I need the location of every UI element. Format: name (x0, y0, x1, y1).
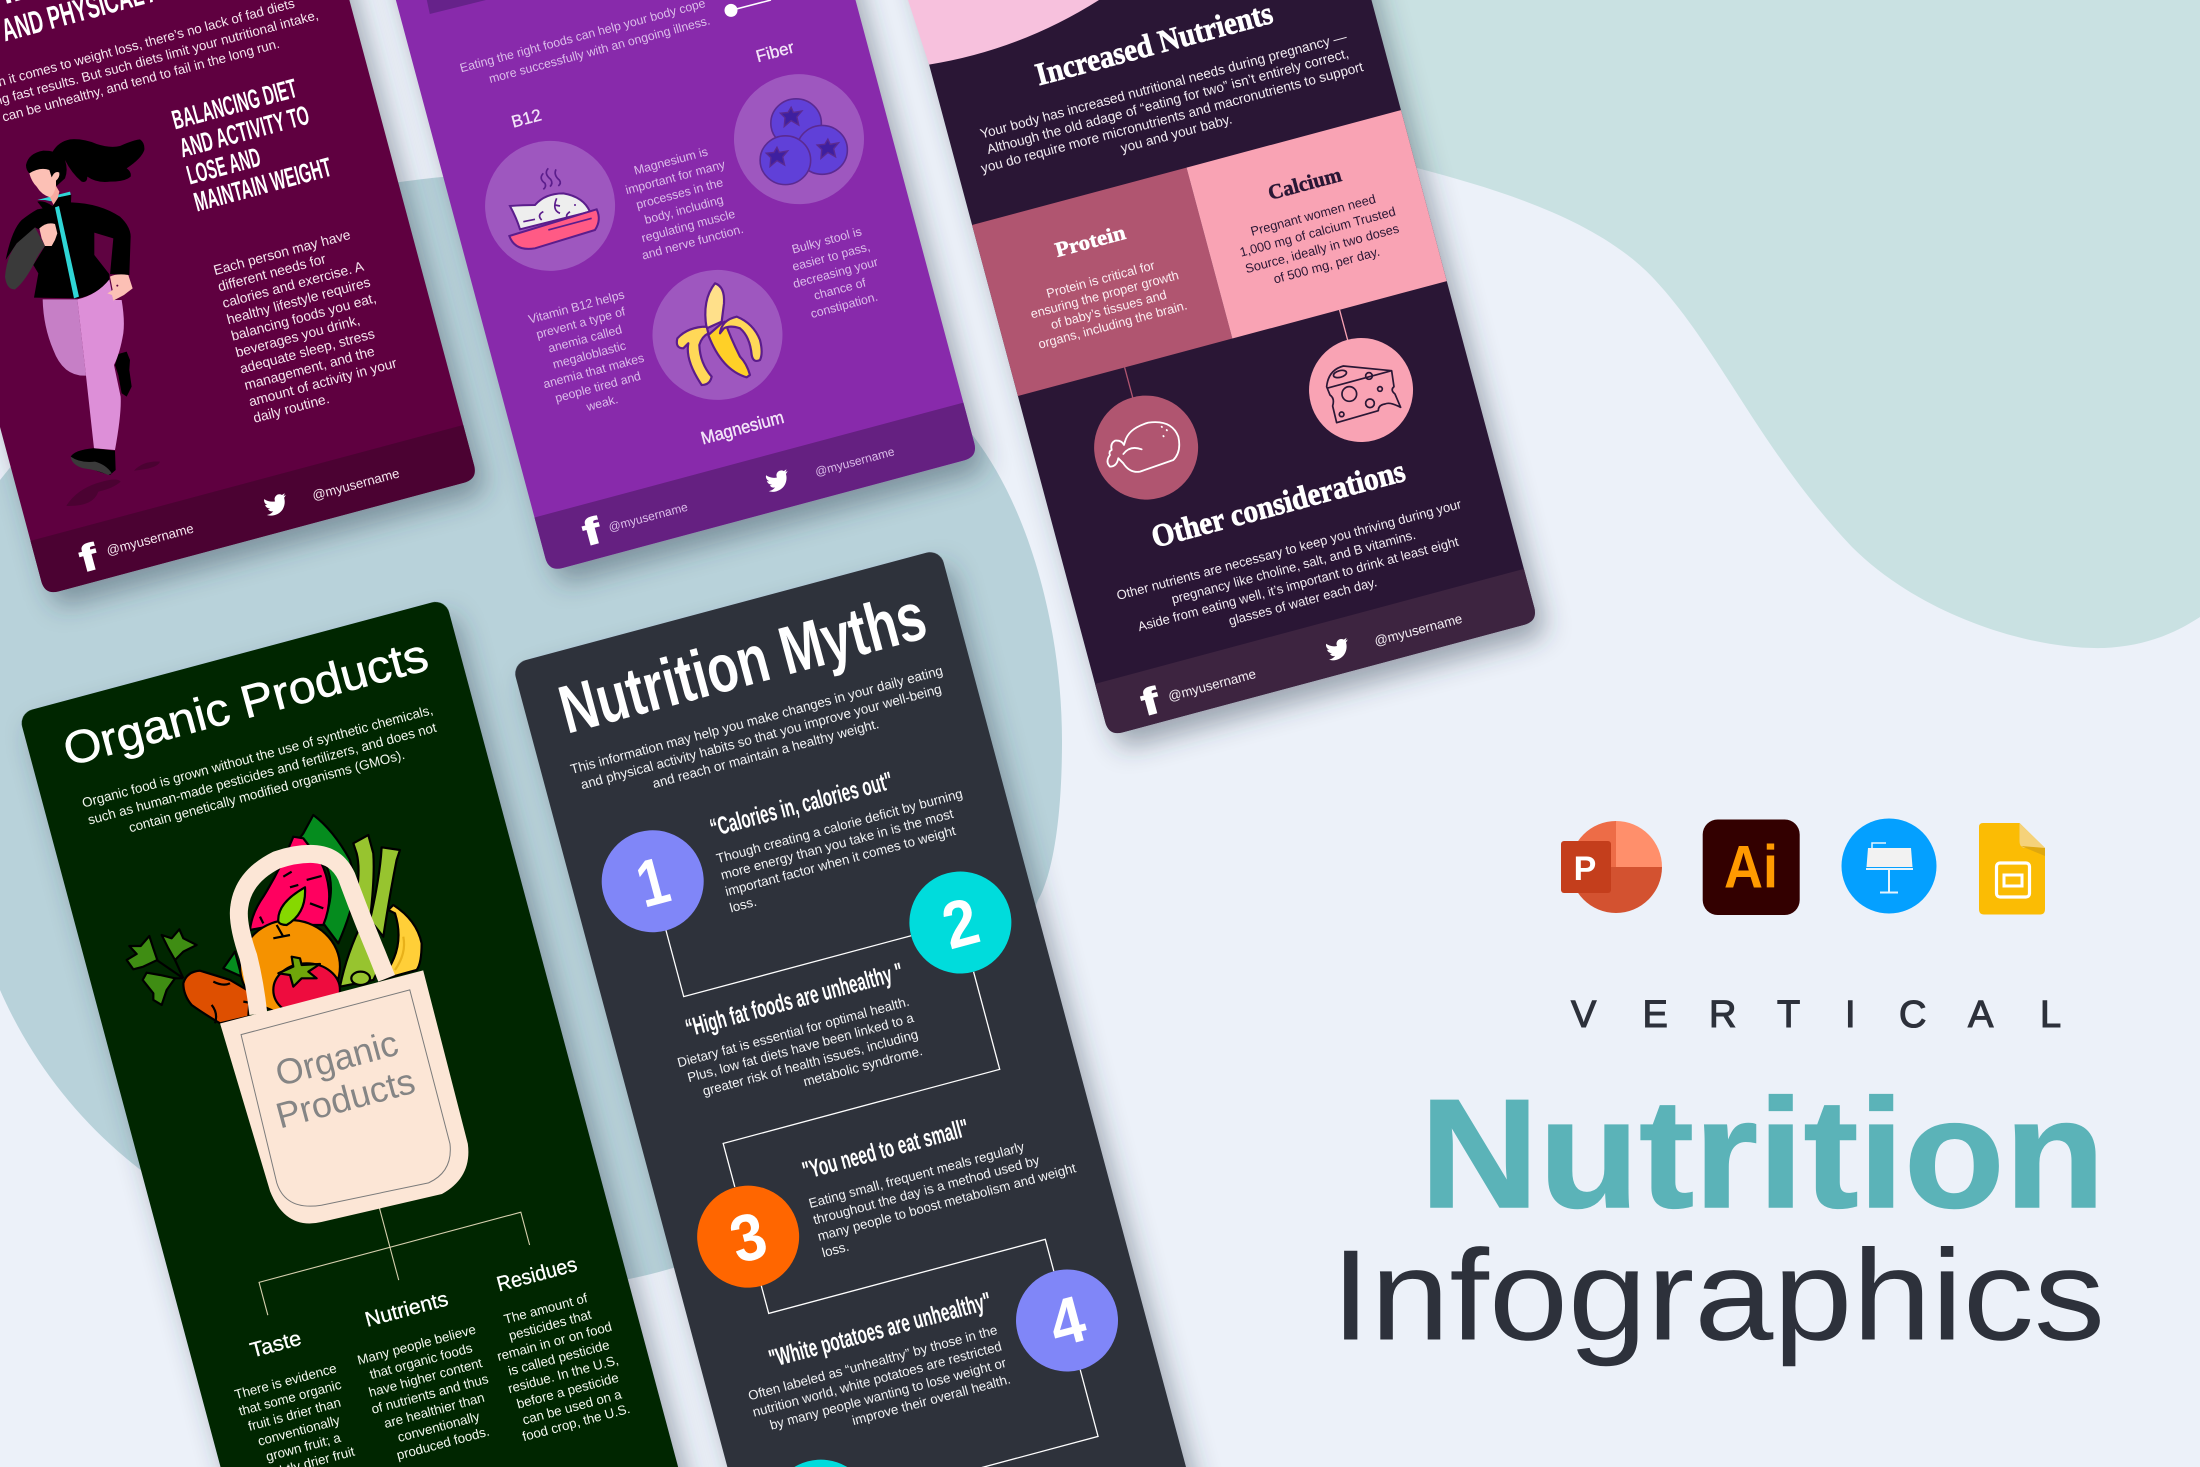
intro text: and reach or maintain a healthy weight. (651, 716, 880, 791)
circle: Magnesium (638, 255, 797, 415)
body text: daily routine. (251, 391, 331, 426)
bag label text: Products (271, 1060, 419, 1136)
label: Fiber: Fiber (754, 38, 796, 66)
card background (19, 599, 730, 1467)
heading: protein: Protein (1052, 220, 1128, 262)
card footer band (31, 425, 478, 595)
text: taste: that some organic (237, 1377, 343, 1419)
myth 2 text: greater risk of health issues, including (701, 1027, 920, 1099)
icon: facebook: f (75, 536, 103, 580)
text: calcium: of 500 mg, per day. (1272, 244, 1381, 287)
intro text: can be unhealthy, and tend to fail in the long run. (0, 36, 281, 125)
card background (0, 0, 478, 595)
text: b12: anemia called (547, 322, 624, 356)
connector lines (666, 856, 1098, 1467)
intro text: Your body has increased nutritional needs during pregnancy — (979, 29, 1349, 142)
text: fiber: decreasing your (791, 255, 880, 291)
text: fiber: chance of (812, 275, 868, 303)
tree connector (248, 1173, 530, 1315)
twitter username: @myusername (814, 444, 896, 479)
facebook username: @myusername (607, 500, 690, 534)
icon: powerpoint: P (1574, 850, 1596, 888)
intro text: you do require more micronutrients and macronutrients to support (979, 59, 1365, 176)
text: taste: There is evidence (233, 1361, 338, 1402)
text: residues: is called pesticide (507, 1337, 611, 1379)
text: nutrients: of nutrients and thus (370, 1371, 490, 1417)
header band: purple card top (427, 0, 486, 14)
intro text: you and your baby. (1119, 111, 1234, 156)
step 3 (686, 1174, 811, 1299)
body text: calories and exercise. A (221, 258, 366, 311)
facebook username: @myusername (1166, 666, 1258, 704)
text: fiber: constipation. (809, 290, 879, 321)
card background (316, 0, 978, 572)
text: b12: Vitamin B12 helps (527, 287, 626, 327)
myth 3 text: Eating small, frequent meals regularly (807, 1139, 1026, 1211)
myth 2 text: Dietary fat is essential for optimal health. (676, 994, 911, 1070)
myth 4 heading: "White potatoes are unhealthy" (766, 1287, 994, 1373)
panel: nutrients card (purple) (316, 0, 978, 572)
text: other considerations: Aside from eating well, it’s important to drink at least eight (1136, 534, 1460, 634)
step 2 (898, 860, 1023, 985)
panel: nutrition myths card (charcoal) (512, 549, 1225, 1467)
icon: facebook: f (1137, 679, 1164, 724)
text: magnesium: important for many (624, 157, 727, 197)
body text: different needs for (216, 251, 328, 294)
text: other considerations: Other nutrients are necessary to keep you thriving during your (1115, 496, 1464, 603)
icon: google slides (1979, 823, 2045, 914)
panel: protein (972, 168, 1232, 396)
myth 2 text: metabolic syndrome. (802, 1043, 924, 1089)
myth 4 text: Often labeled as “unhealthy” by those in the (747, 1322, 999, 1403)
text: fiber: easier to pass, (791, 240, 872, 274)
text: magnesium: body, including (643, 192, 725, 227)
illustration: vegetables in bag (127, 815, 422, 1023)
heading: calcium: Calcium (1265, 162, 1344, 205)
body text: amount of activity in your (247, 355, 399, 409)
myth 1 heading: “Calories in, calories out" (707, 767, 896, 842)
circle: Fiber (719, 60, 879, 219)
myth 4 text: by many people wanting to lose weight or (768, 1355, 1008, 1433)
label: taste: Taste (248, 1327, 304, 1362)
panel: healthy diet card (maroon) (0, 0, 478, 595)
icon: facebook: f (578, 509, 606, 554)
twitter username: @myusername (311, 465, 401, 503)
heading: balancing diet (169, 70, 335, 217)
intro text: This information may help you make changes in your daily eating (569, 663, 944, 777)
text: vertical: VERTICAL (1571, 994, 2061, 1036)
twitter username: @myusername (1373, 611, 1464, 649)
body text: healthy lifestyle requires (225, 274, 372, 327)
step 4 (1005, 1258, 1129, 1383)
icon: cheese (1327, 366, 1401, 423)
icon: banana (677, 283, 762, 385)
heading: balancing diet: LOSE AND (183, 142, 264, 190)
circle: calcium (1297, 326, 1425, 454)
text: residues: The amount of (502, 1290, 589, 1327)
intro text: such as human-made pesticides and fertilizers, and does not (86, 720, 438, 828)
intro text: contain genetically modified organisms (GMOs). (127, 747, 406, 835)
header shape: pink top (908, 0, 1099, 65)
body text: adequate sleep, stress (238, 326, 376, 377)
icon: fish on plate (509, 168, 599, 249)
text: protein: Protein is critical for (1045, 257, 1157, 301)
step 2: 2 (935, 883, 987, 963)
text: b12: anemia that makes (542, 351, 646, 391)
text: residues: pesticides that (507, 1307, 593, 1343)
text: residues: remain in or on food (495, 1319, 613, 1364)
text: protein: organs, including the brain. (1036, 297, 1189, 352)
step 5 (758, 1448, 883, 1467)
connector: white dot line (724, 0, 771, 17)
myth 3 text: loss. (820, 1239, 851, 1260)
icon: illustrator (1703, 820, 1800, 915)
body text: management, and the (243, 344, 377, 393)
text: magnesium: regulating muscle (640, 207, 737, 245)
label: Magnesium: Magnesium (699, 407, 786, 448)
text: nutrients: produced foods. (395, 1424, 491, 1463)
connector: protein (1125, 367, 1133, 398)
icon: twitter (262, 493, 290, 517)
title: Organic Products (58, 628, 433, 776)
step 1 (590, 819, 715, 944)
text: residues: can be used on a (521, 1386, 624, 1428)
panel: calcium (1187, 110, 1447, 339)
myth 3 text: throughout the day is a method used by (811, 1152, 1041, 1227)
body text: Each person may have (212, 227, 352, 278)
illustration: tote bag (220, 970, 468, 1223)
label: B12: B12 (509, 105, 544, 132)
connector: calcium (1340, 310, 1348, 341)
myth 2 text: Plus, low fat diets have been linked to a (686, 1010, 916, 1085)
text: nutrients: that organic foods (368, 1340, 474, 1382)
icon: blueberries (760, 99, 847, 185)
myth 1 text: important factor when it comes to weight (723, 823, 958, 899)
text: calcium: Source, ideally in two doses (1243, 221, 1401, 276)
text: magnesium: Magnesium is (632, 144, 709, 178)
text: magnesium: and nerve function. (640, 222, 745, 262)
intro text: more successfully with an ongoing illness. (487, 13, 712, 86)
icon: chicken (1107, 422, 1179, 472)
text: taste: conventionally (256, 1412, 342, 1449)
text: magnesium: processes in the (635, 175, 725, 212)
myth 1 text: loss. (728, 894, 758, 915)
myth 1 text: Though creating a calorie deficit by burning (715, 786, 964, 866)
label: residues: Residues (494, 1253, 580, 1296)
myth 1 text: more energy than you take in is the most (719, 806, 955, 883)
heading: balancing diet: BALANCING DIET (169, 73, 300, 135)
text: calcium: Pregnant women need (1249, 191, 1377, 239)
bag label text: Organic (271, 1022, 402, 1094)
text: b12: megaloblastic (551, 338, 627, 371)
text: b12: people tired and (553, 369, 642, 405)
title: Nutrition Myths (551, 578, 934, 748)
text: nutrients: Many people believe (356, 1322, 477, 1368)
circle: B12 (470, 126, 630, 285)
icon: illustrator: Ai (1724, 834, 1778, 900)
icon: twitter (764, 469, 792, 493)
text: taste: fruit is drier than (246, 1395, 342, 1434)
myth 4 text: nutrition world, white potatoes are restricted (751, 1339, 1003, 1420)
heading: balancing diet: AND ACTIVITY TO (176, 100, 312, 163)
text: residues: residue. In the U.S, (506, 1352, 620, 1396)
myth 4 text: improve their overall health. (850, 1371, 1012, 1428)
icon: twitter (1324, 637, 1352, 662)
body text: beverages you drink, (234, 312, 362, 360)
text: b12: weak. (584, 392, 620, 414)
title: nutrition: Nutrition (1420, 1067, 2105, 1240)
blob: large blue-grey shape behind cards (0, 176, 1062, 1289)
panel: organic products card (dark green) (19, 599, 730, 1467)
text: protein: of baby’s tissues and (1049, 287, 1168, 332)
panel: pregnancy nutrients card (dark plum) (876, 0, 1538, 736)
card background (512, 549, 1225, 1467)
text: fiber: Bulky stool is (790, 224, 863, 256)
step 1: 1 (629, 842, 677, 921)
intro text: Although the old adage of “eating for two” isn’t entirely correct, (985, 46, 1350, 157)
card background (876, 0, 1538, 736)
bag label text (261, 1020, 419, 1136)
body text: balancing foods you eat, (229, 290, 378, 344)
title: infographics: Infographics (1331, 1224, 2105, 1368)
myth 2 heading: “High fat foods are unhealthy " (683, 958, 906, 1043)
text: nutrients: are healthier than (382, 1390, 486, 1431)
step 3: 3 (722, 1197, 774, 1277)
facebook username: @myusername (105, 521, 195, 558)
illustration: running woman (5, 139, 160, 506)
text: residues: food crop, the U.S. (521, 1401, 632, 1444)
icon: keynote (1842, 818, 1936, 914)
text: nutrients: conventionally (396, 1409, 482, 1445)
text: residues: before a pesticide (515, 1370, 620, 1411)
text: other considerations: glasses of water each day. (1227, 574, 1379, 628)
text: other considerations: pregnancy like choline, salt, and B vitamins. (1170, 527, 1417, 607)
card footer band (1095, 569, 1538, 736)
heading: other considerations: Other considerations (1147, 452, 1409, 554)
step 4: 4 (1041, 1281, 1093, 1361)
card footer band (535, 403, 978, 572)
text: calcium: 1,000 mg of calcium Trusted (1238, 204, 1397, 260)
myth 3 heading: "You need to eat small" (799, 1114, 972, 1185)
icon: powerpoint (1561, 821, 1662, 913)
text: b12: prevent a type of (535, 304, 627, 342)
text: taste: grown fruit; a (264, 1430, 343, 1464)
label: nutrients: Nutrients (363, 1287, 451, 1332)
blob: top right teal (1300, 0, 2200, 648)
circle: protein (1082, 384, 1210, 511)
intro text: Organic food is grown without the use of synthetic chemicals, (80, 702, 434, 810)
heading: balancing diet: MAINTAIN WEIGHT (191, 152, 335, 217)
text: nutrients: have higher content (367, 1355, 484, 1400)
intro text: and physical activity habits so that you improve your well-being (579, 681, 943, 792)
text: protein: ensuring the proper growth (1029, 267, 1180, 321)
myth 3 text: many people to boost metabolism and weight (816, 1160, 1078, 1244)
